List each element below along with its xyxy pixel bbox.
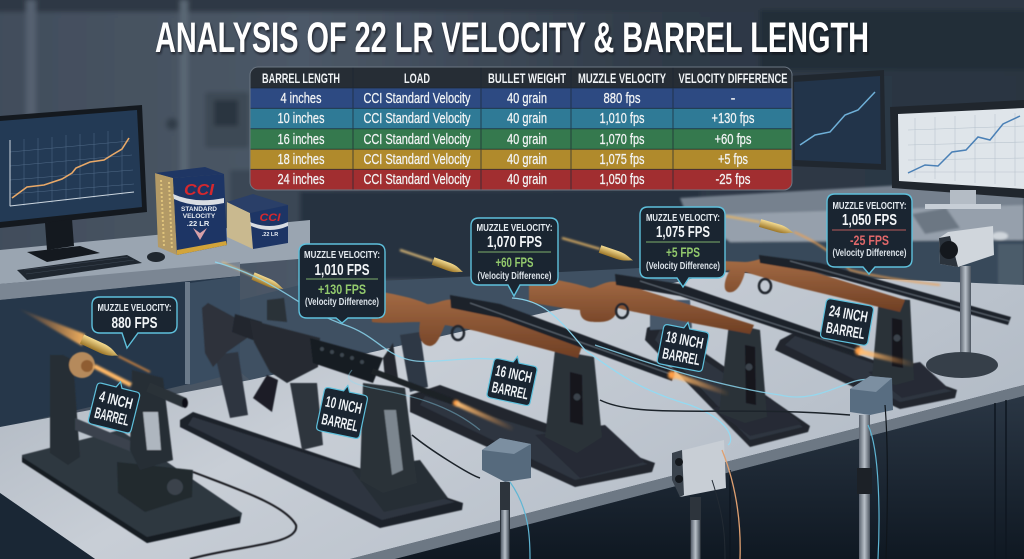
table rows: 16 inches (278, 132, 324, 148)
callout: muzzle velocity 1,075 fps: MUZZLE VELOCITY: (646, 212, 720, 224)
bullet trail 4 inch (17, 308, 150, 387)
callout: muzzle velocity 1,010 fps: +130 FPS (318, 281, 366, 297)
table rows: 10 inches (278, 111, 324, 127)
callout: muzzle velocity 880 fps (92, 297, 177, 348)
table rows: 24 inches (278, 172, 324, 188)
table header row: BULLET WEIGHT (488, 71, 567, 86)
callout: muzzle velocity 1,050 fps: MUZZLE VELOCITY: (832, 200, 906, 212)
ammo box: CCI Standard Velocity large (155, 167, 227, 255)
callout: muzzle velocity 1,075 fps (640, 207, 725, 287)
bullet 10 inch (222, 262, 285, 293)
data table (250, 67, 792, 190)
table header row: LOAD (404, 71, 430, 86)
ammo box: CCI Standard Velocity large: VELOCITY (183, 213, 216, 220)
ammo box: CCI Standard Velocity large: STANDARD (181, 206, 217, 213)
table rows: CCI Standard Velocity (364, 172, 471, 188)
table rows: 40 grain (507, 152, 547, 168)
table rows: CCI Standard Velocity (364, 91, 471, 107)
overhead camera on stand (926, 226, 998, 378)
callout: muzzle velocity 880 fps: MUZZLE VELOCITY: (98, 302, 172, 314)
label: 24 inch barrel (820, 298, 874, 346)
label: 4 inch barrel: 4 INCH (97, 388, 134, 413)
label: 10 inch barrel (316, 381, 369, 439)
rifle 10 inch barrel AR style (180, 298, 463, 528)
table rows (250, 67, 792, 190)
ammo box: CCI small: CCI (260, 212, 282, 224)
table cables (412, 400, 850, 478)
table rows: +5 fps (718, 152, 748, 168)
back panel behind the table (240, 265, 720, 380)
table rows: CCI Standard Velocity (364, 152, 471, 168)
ammo box: CCI Standard Velocity large: CCI (184, 182, 215, 199)
table rows: CCI Standard Velocity (364, 132, 471, 148)
callout: muzzle velocity 1,070 fps (471, 218, 558, 296)
rifle 4 inch barrel on bench rest (22, 352, 296, 559)
table rows: 1,050 fps (600, 172, 644, 188)
rifle 24 inch barrel (700, 255, 1011, 409)
label: 4 inch barrel: BARREL (93, 405, 131, 430)
table rows: 4 inches (280, 91, 322, 107)
callout: muzzle velocity 1,050 fps: 1,050 FPS (842, 212, 897, 229)
ammo box: CCI Standard Velocity large: .22 LR (187, 219, 210, 228)
left monitor with velocity chart (0, 105, 147, 262)
callout: muzzle velocity 1,050 fps: (Velocity Difference) (832, 248, 906, 259)
callout: muzzle velocity 1,010 fps: 1,010 FPS (314, 262, 370, 279)
label: 4 inch barrel (88, 376, 142, 434)
chronograph left (482, 438, 531, 559)
label: 24 inch barrel: 24 INCH (828, 303, 869, 326)
table header row: VELOCITY DIFFERENCE (678, 71, 788, 86)
table rows: 40 grain (507, 91, 547, 107)
table rows: CCI Standard Velocity (364, 111, 471, 127)
callout: muzzle velocity 1,070 fps: 1,070 FPS (487, 234, 542, 251)
label: 10 inch barrel: 10 INCH (324, 394, 363, 418)
keyboard and mouse (17, 252, 165, 280)
chronograph right (850, 376, 893, 559)
callout: muzzle velocity 1,075 fps: (Velocity Difference) (646, 261, 720, 272)
label: 16 inch barrel: BARREL (490, 379, 530, 403)
ammo box: CCI small: .22 LR (262, 232, 278, 238)
callout: muzzle velocity 1,010 fps: MUZZLE VELOCITY: (304, 249, 380, 261)
table rows: +130 fps (712, 111, 754, 127)
table rows: 880 fps (604, 91, 640, 107)
bullets with motion trails (17, 216, 940, 387)
rifle 16 inch barrel (370, 290, 676, 487)
callout: muzzle velocity 1,050 fps (827, 194, 912, 274)
label: 18 inch barrel: 18 INCH (664, 329, 705, 353)
callout: muzzle velocity 1,010 fps (299, 244, 385, 323)
sensors and chronographs on stands (412, 226, 998, 559)
table rows: 40 grain (507, 172, 547, 188)
bullet 18 inch (562, 238, 634, 264)
label: 18 inch barrel (657, 318, 711, 372)
bullet 24 inch (725, 216, 940, 285)
callout: muzzle velocity 1,070 fps: (Velocity Difference) (478, 271, 552, 282)
table rows: +60 fps (714, 132, 752, 148)
label: 16 inch barrel (486, 352, 539, 406)
table rows: 18 inches (278, 152, 324, 168)
right monitor with rising chart (890, 100, 1024, 209)
callout: muzzle velocity 1,010 fps: (Velocity Difference) (305, 297, 379, 308)
table rows: -25 fps (716, 172, 750, 188)
callout: muzzle velocity 1,070 fps: +60 FPS (496, 254, 534, 270)
table rows: 1,010 fps (600, 111, 644, 127)
rifle 18 inch barrel (529, 274, 863, 447)
table header row: MUZZLE VELOCITY (578, 71, 666, 86)
label: 18 inch barrel: BARREL (661, 345, 701, 369)
callout: muzzle velocity 1,075 fps: +5 FPS (666, 244, 700, 260)
table rows: 1,070 fps (600, 132, 644, 148)
table rows: 1,075 fps (600, 152, 644, 168)
rear monitor (789, 70, 886, 170)
table header row (250, 67, 792, 88)
label: 10 inch barrel: BARREL (320, 411, 360, 435)
back right counter (680, 178, 1024, 300)
ammo box: CCI small (227, 194, 288, 249)
callout: muzzle velocity 1,070 fps: MUZZLE VELOCITY: (476, 222, 552, 234)
label: 24 inch barrel: BARREL (825, 320, 866, 343)
chronograph center (672, 440, 740, 559)
callout: muzzle velocity 1,075 fps: 1,075 FPS (656, 224, 710, 241)
electric blue signal wisps (215, 262, 870, 445)
table rows: 40 grain (507, 132, 547, 148)
bullet 16 inch (400, 250, 464, 276)
table rows: - (731, 91, 736, 107)
left counter (0, 220, 310, 428)
table rows: 40 grain (507, 111, 547, 127)
callout: muzzle velocity 1,050 fps: -25 FPS (850, 232, 889, 248)
table header row: BARREL LENGTH (262, 71, 340, 86)
velocity muzzle flashes (456, 349, 915, 431)
callout: muzzle velocity 880 fps: 880 FPS (112, 315, 158, 332)
main table (0, 272, 1024, 559)
label: 16 inch barrel: 16 INCH (494, 363, 533, 387)
